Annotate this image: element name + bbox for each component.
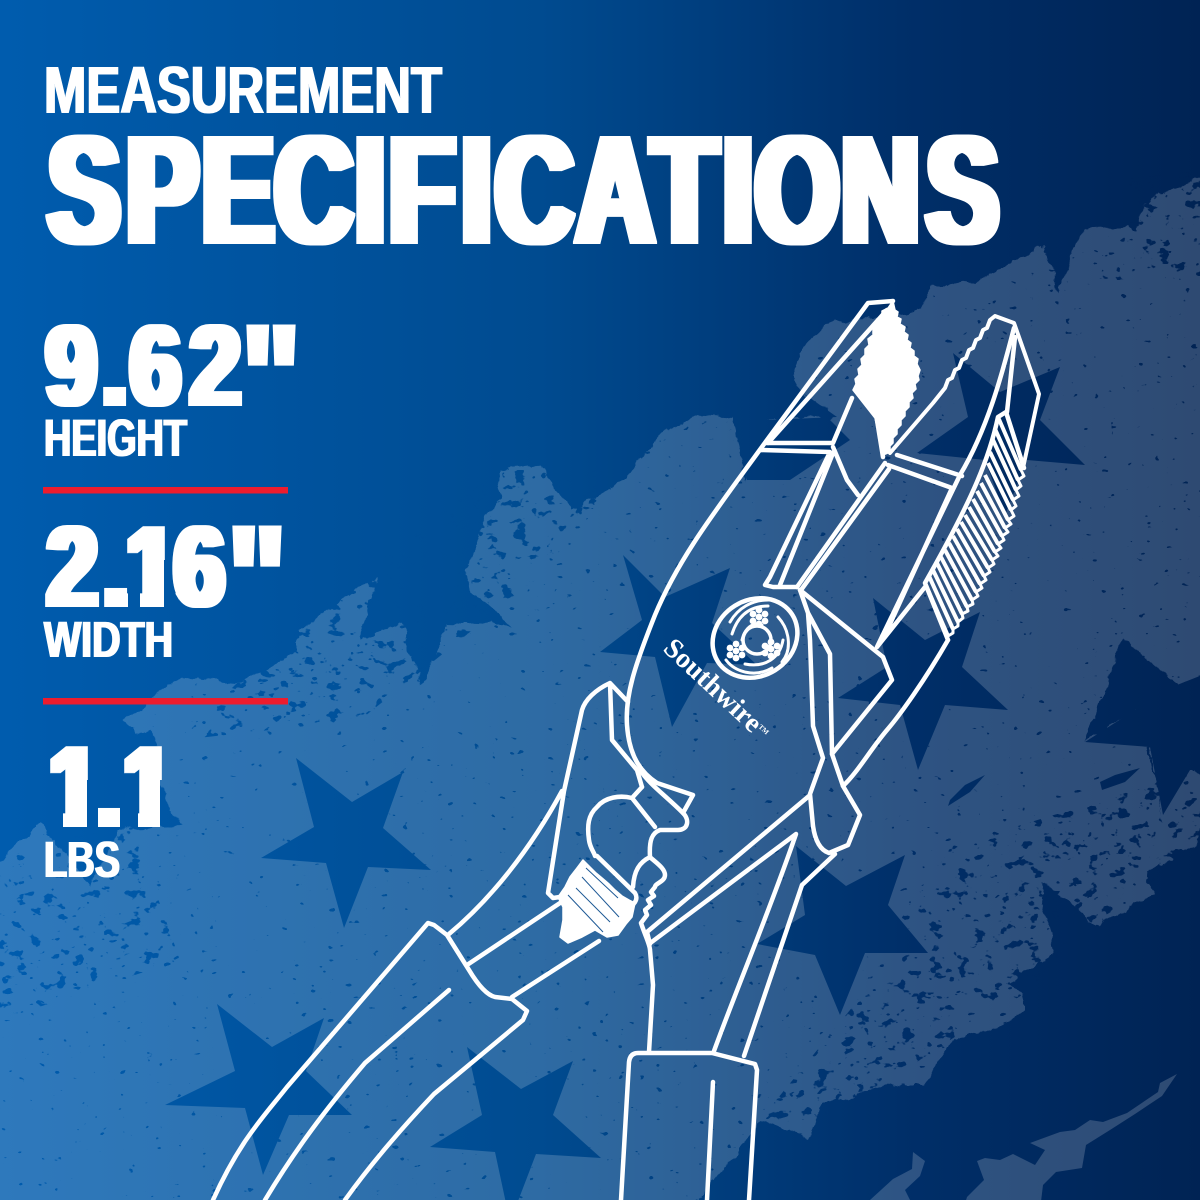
upper jaw facets [760, 398, 883, 587]
right handle arm [647, 796, 809, 1051]
brand name: Southwire [657, 632, 768, 739]
title [44, 53, 998, 277]
value: 9.62 inches: 9.62 [46, 302, 241, 429]
lower jaw ribs [925, 417, 1021, 636]
ribs inner border and top block [925, 412, 1024, 640]
wire strand swirls [726, 600, 788, 673]
value: 1.1: 1.1 [49, 723, 174, 850]
value: 2.16 inches [45, 525, 282, 608]
threaded crimper [558, 860, 635, 943]
value: 2.16 inches: 2.16 [47, 503, 225, 630]
left handle shaft [449, 791, 599, 997]
value: 9.62 inches [46, 289, 301, 473]
brand name: TM [757, 723, 771, 737]
left handle grip [213, 923, 527, 1200]
lower jaw facets [797, 328, 1015, 647]
ribs serrated outer edge [948, 470, 1024, 636]
title line: measurement: MEASUREMENT [44, 53, 442, 128]
pivot screw [698, 582, 812, 694]
value: 9.62 inches: " [241, 289, 301, 473]
right handle grip [621, 1053, 757, 1200]
upper jaw serrated face [853, 301, 920, 455]
title line: specifications: SPECIFICATIONS [48, 105, 998, 277]
background stars [165, 353, 1200, 1200]
stat: width [43, 525, 282, 657]
pivot tang and droplet [744, 590, 860, 1056]
red divider 1 [43, 487, 288, 494]
stat: weight [46, 746, 162, 878]
label: height: HEIGHT [44, 409, 187, 468]
crimper thread lines [568, 868, 619, 932]
grunge flecks [0, 170, 1200, 1120]
label: width: WIDTH [44, 611, 173, 668]
red divider 2 [43, 698, 288, 704]
stat: height [44, 289, 301, 473]
cutter and crimping neck [588, 770, 687, 1052]
label: lbs: LBS [44, 831, 120, 888]
pliers line illustration [213, 301, 1039, 1200]
lower body edge [800, 590, 948, 786]
wire strand clusters [727, 607, 780, 661]
left handle jaw cheek [548, 683, 642, 898]
upper jaw outline [627, 301, 893, 813]
lower jaw tip [890, 316, 1039, 468]
value: 2.16 inches: " [227, 490, 287, 674]
